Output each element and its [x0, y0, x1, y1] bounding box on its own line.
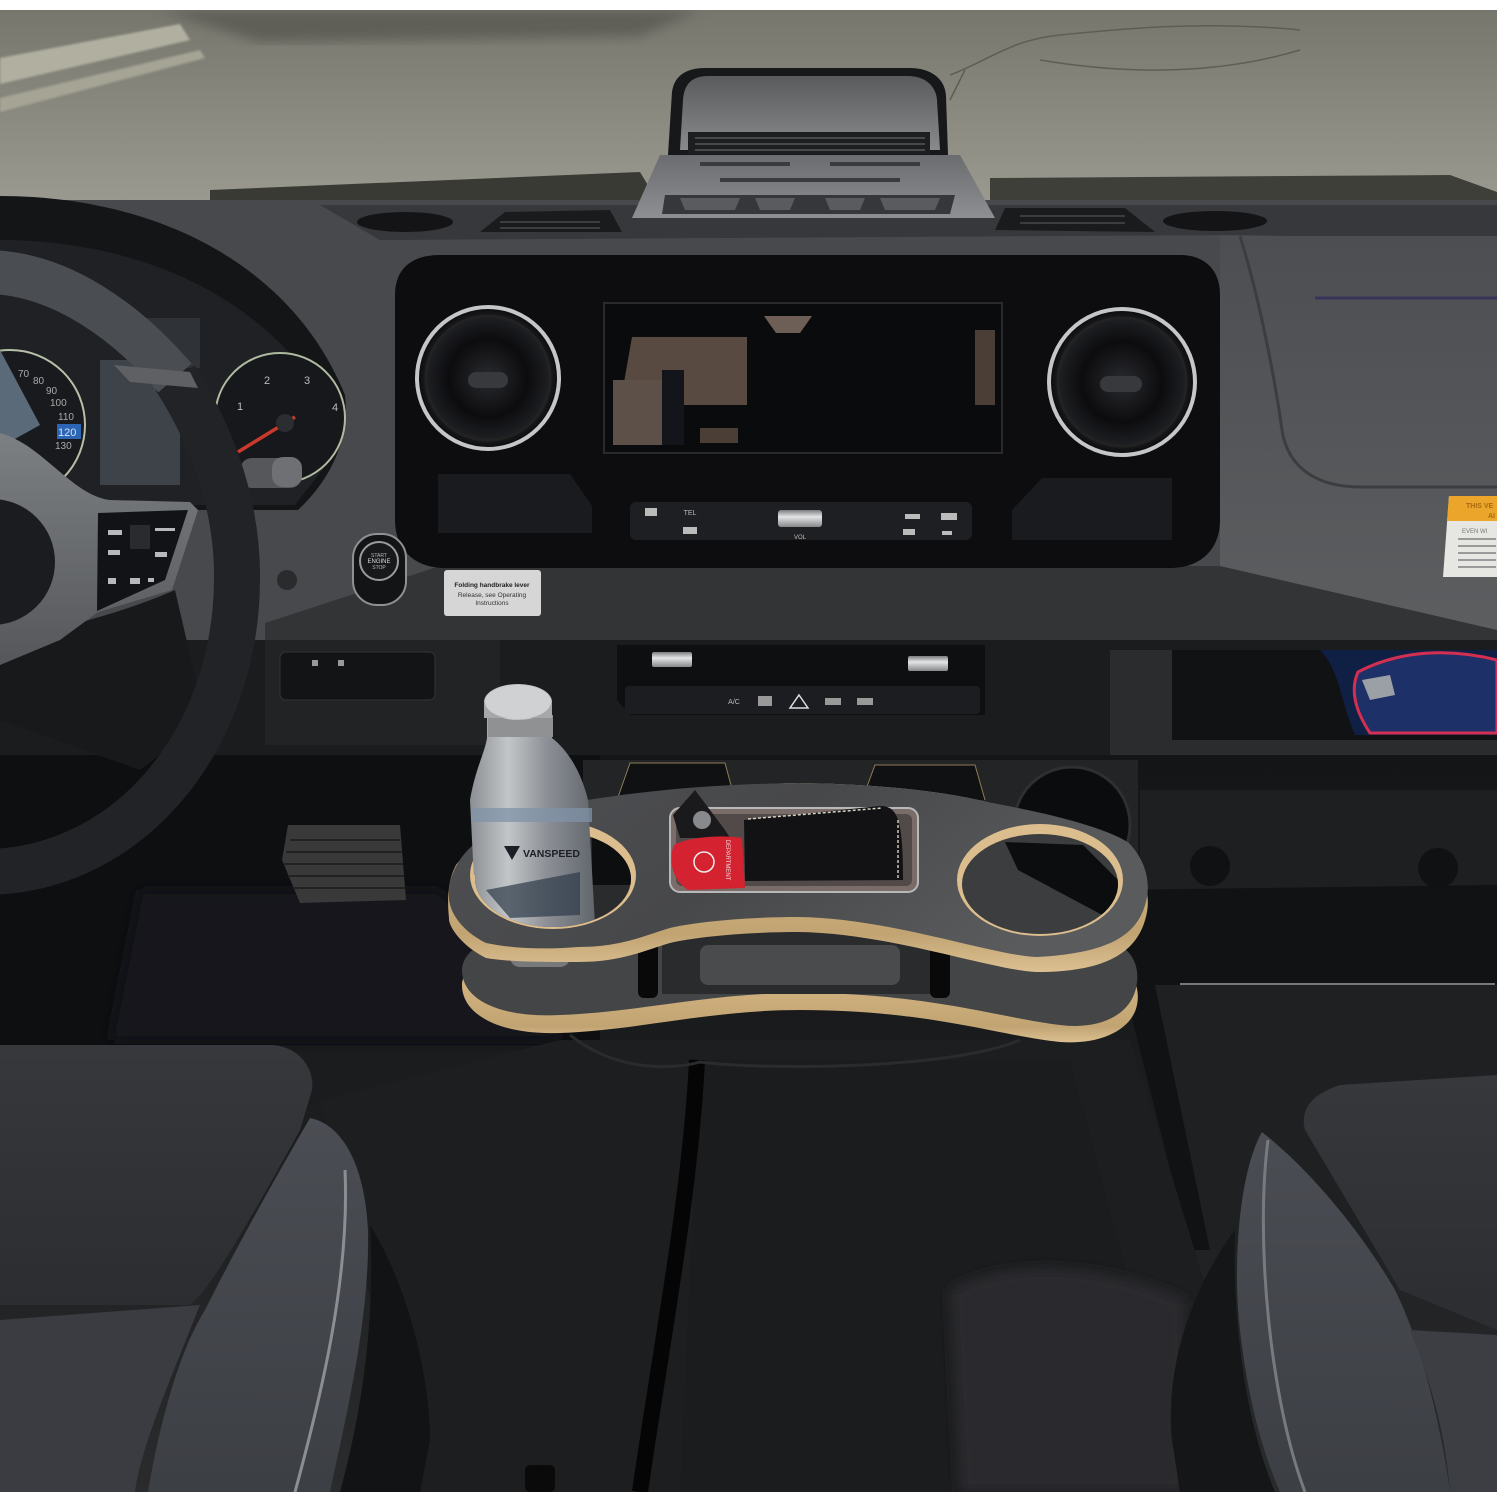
warning sticker: AI [1488, 513, 1495, 520]
tray: left cup hole [470, 821, 636, 929]
tray: upper shelf [448, 783, 1148, 972]
right seat [1171, 1075, 1497, 1492]
start engine button: STOP [372, 565, 386, 571]
wallet [744, 806, 903, 881]
control strip: VOL [794, 535, 807, 541]
speedometer: 120 [58, 427, 76, 439]
windshield base and wipers [210, 172, 1497, 200]
speedometer [0, 349, 86, 477]
tachometer: 4 [332, 402, 338, 414]
warning sticker: EVEN WI [1462, 529, 1488, 535]
infotainment screen [604, 303, 1002, 453]
tray: center metal recess and legs [638, 930, 950, 998]
warning sticker: THIS VE [1466, 503, 1494, 510]
lower dash band [0, 640, 1497, 765]
start engine button [353, 534, 406, 605]
tray: clear pocket [670, 808, 918, 892]
tachometer [215, 353, 345, 483]
climate control panel [617, 645, 985, 715]
tachometer: 2 [264, 375, 270, 387]
handbrake label: Release, see Operating [458, 592, 527, 599]
speedometer: 70 [18, 369, 30, 380]
cup tray bracket behind [583, 760, 1138, 854]
tray: lower shelf [462, 945, 1138, 1042]
tachometer: 1 [237, 401, 243, 413]
speedometer: 130 [55, 441, 72, 452]
mounting plate [632, 155, 995, 218]
center stack [395, 255, 1220, 568]
control strip [438, 474, 1172, 541]
steering wheel [0, 272, 237, 872]
tray: right cup hole [957, 824, 1125, 936]
left seat [0, 1045, 430, 1492]
climate control panel: A/C [728, 699, 740, 706]
start engine button: ENGINE [367, 559, 391, 565]
start engine button: START [371, 553, 387, 559]
speaker grille [277, 570, 297, 590]
red tag: DEPARTMENT [724, 840, 730, 881]
head-up hood [668, 68, 948, 155]
key fob [673, 790, 730, 838]
red tag [671, 836, 745, 890]
glovebox shelf with towel [1172, 650, 1497, 740]
speedometer: 110 [58, 412, 74, 423]
handbrake label: Folding handbrake lever [454, 582, 530, 589]
control strip: TEL [684, 510, 697, 517]
speedometer: 100 [50, 398, 67, 409]
water bottle [470, 684, 597, 960]
water bottle: VANSPEED [523, 848, 580, 860]
handbrake label [444, 570, 541, 616]
left round vent [417, 307, 559, 449]
indicator stalk [240, 457, 302, 488]
air vents and cup recesses on dash top [357, 208, 1267, 232]
dashboard body [0, 200, 1497, 645]
handbrake label: Instructions [475, 600, 509, 607]
footwell and floor [0, 755, 1497, 1495]
instrument binnacle [0, 196, 346, 510]
switch panel left [280, 652, 435, 700]
background: pavement outside windshield [0, 10, 1497, 200]
speedometer: 80 [33, 376, 45, 387]
speedometer: 90 [46, 386, 58, 397]
bottle base under tray [510, 960, 568, 967]
pedal [282, 825, 406, 903]
warning sticker [1443, 496, 1497, 577]
right round vent [1049, 309, 1195, 455]
tachometer: 3 [304, 375, 310, 387]
